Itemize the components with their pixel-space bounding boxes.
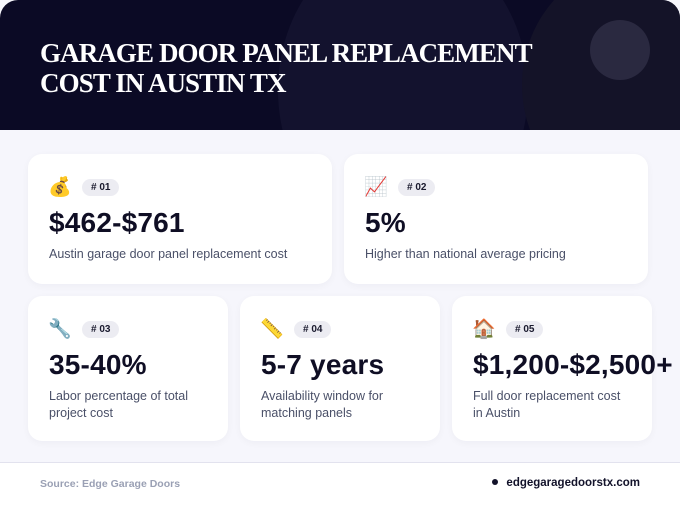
header — [0, 0, 680, 130]
tag 01: # 01 — [91, 182, 110, 193]
website: edgegaragedoorstx.com — [506, 477, 640, 489]
desc 3: Labor percentage of total — [49, 389, 188, 403]
desc 5 — [473, 389, 620, 420]
tag 05 — [506, 321, 543, 338]
tag 04: # 04 — [303, 324, 322, 335]
desc 4: matching panels — [261, 406, 352, 420]
desc 4: Availability window for — [261, 389, 383, 403]
card 5 — [452, 296, 652, 441]
number 5: $1,200-$2,500+ — [473, 349, 673, 380]
desc 2: Higher than national average pricing — [365, 247, 566, 261]
footer — [0, 462, 680, 507]
card 1 — [28, 154, 332, 284]
tag 04 — [294, 321, 331, 338]
title — [40, 38, 532, 98]
tag 02 — [398, 179, 435, 196]
title: COST IN AUSTIN TX — [40, 68, 286, 98]
desc 3 — [49, 389, 188, 420]
desc 3: project cost — [49, 406, 113, 420]
number 1: $462-$761 — [49, 207, 185, 238]
source: Source: Edge Garage Doors — [40, 478, 180, 490]
number 2: 5% — [365, 207, 406, 238]
desc 4 — [261, 389, 383, 420]
tag 05: # 05 — [515, 324, 534, 335]
number 4: 5-7 years — [261, 349, 384, 380]
icon: wrench: 🔧 — [48, 319, 72, 340]
tag 03 — [82, 321, 119, 338]
card 3 — [28, 296, 228, 441]
desc 5: in Austin — [473, 406, 520, 420]
number 3: 35-40% — [49, 349, 147, 380]
icon: chart: 📈 — [364, 177, 388, 198]
card 4 — [240, 296, 440, 441]
desc 1: Austin garage door panel replacement cost — [49, 247, 287, 261]
icon: ruler: 📏 — [260, 319, 284, 340]
card 2 — [344, 154, 648, 284]
tag 03: # 03 — [91, 324, 110, 335]
tag 01 — [82, 179, 119, 196]
icon: house: 🏠 — [472, 319, 496, 340]
tag 02: # 02 — [407, 182, 426, 193]
icon: money bag: 💰 — [48, 177, 72, 198]
desc 5: Full door replacement cost — [473, 389, 620, 403]
title: GARAGE DOOR PANEL REPLACEMENT — [40, 38, 532, 68]
